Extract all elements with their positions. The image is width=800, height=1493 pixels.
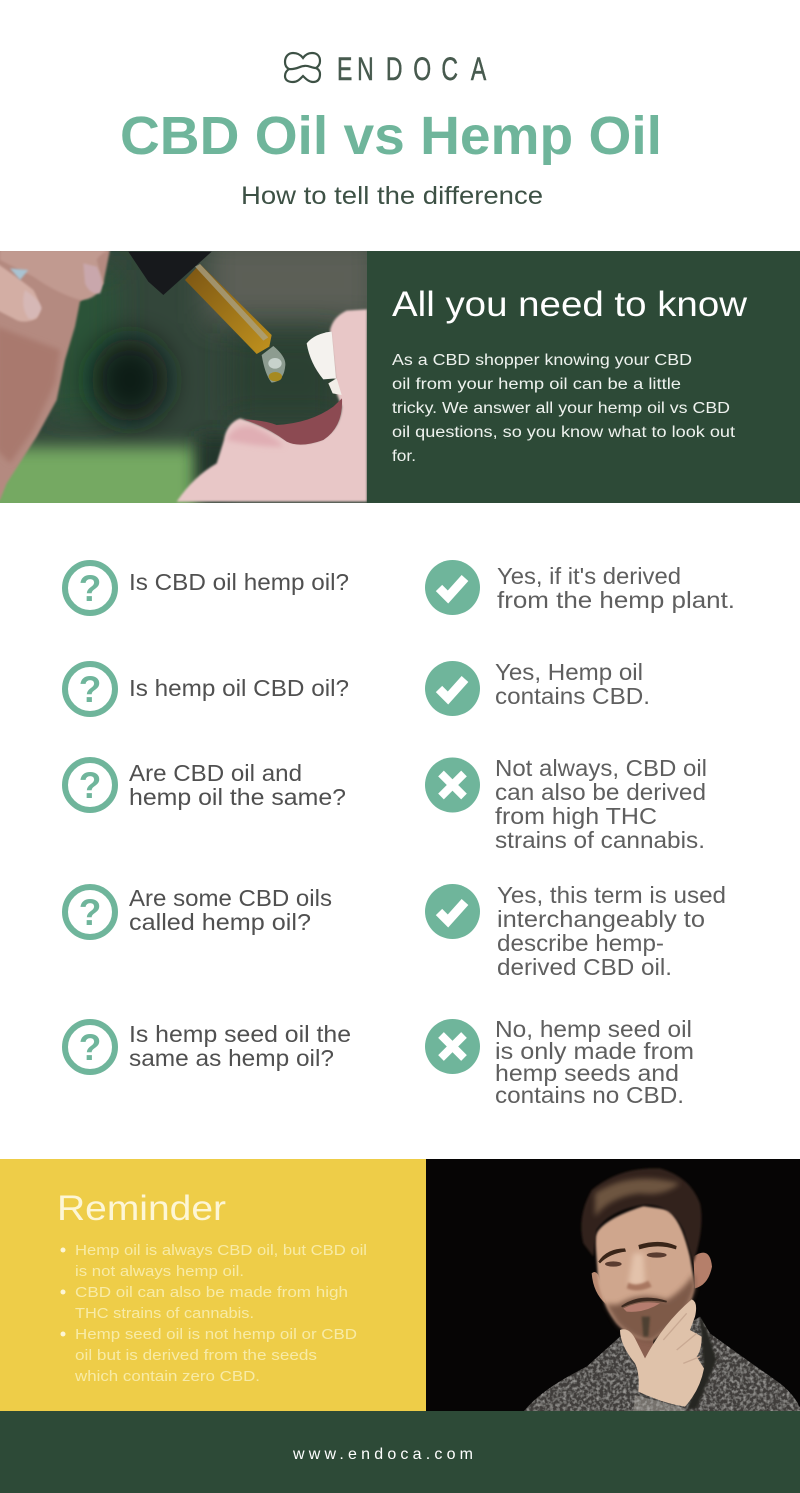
- intro paragraph: As a CBD shopper knowing your CBD: [392, 352, 692, 369]
- icon: question mark: ?: [79, 1027, 101, 1068]
- answer text: from the hemp plant.: [497, 587, 735, 613]
- neck: [633, 1335, 654, 1358]
- panel: all you need to know: [367, 251, 800, 503]
- answer text: Not always, CBD oil: [495, 755, 707, 781]
- question 1: [65, 563, 349, 613]
- question text: [129, 1021, 351, 1071]
- reminder list: Hemp seed oil is not hemp oil or CBD: [75, 1326, 357, 1343]
- logo wordmark: ENDOCA: [337, 51, 487, 87]
- answer 5: [425, 1016, 694, 1108]
- hand: [0, 250, 110, 500]
- answer text: Yes, if it's derived: [497, 563, 681, 589]
- question 2: [65, 664, 349, 714]
- question text: same as hemp oil?: [129, 1045, 334, 1071]
- question text: Are CBD oil and: [129, 760, 302, 786]
- answer text: describe hemp-: [497, 930, 664, 956]
- answer 1: [425, 560, 735, 615]
- answer text: interchangeably to: [497, 906, 705, 932]
- sweater: [523, 1317, 800, 1412]
- reminder heading: Reminder: [57, 1189, 226, 1228]
- icon: question mark: ?: [79, 669, 101, 710]
- intro paragraph: oil questions, so you know what to look out: [392, 424, 736, 441]
- panel heading: All you need to know: [392, 285, 748, 324]
- question text: [129, 885, 332, 935]
- intro paragraph: for.: [392, 448, 416, 465]
- question text: called hemp oil?: [129, 909, 311, 935]
- answer text: derived CBD oil.: [497, 954, 672, 980]
- lips and soul patch: [622, 1298, 667, 1337]
- icon: question mark: ?: [79, 765, 101, 806]
- answer 4: [425, 882, 726, 980]
- answer text: [495, 1016, 694, 1108]
- icon: cross: [425, 758, 480, 812]
- answer text: [497, 563, 735, 613]
- answer text: [495, 755, 707, 853]
- panel: thinking man photo: [426, 1159, 800, 1412]
- reminder list: Hemp oil is always CBD oil, but CBD oil: [75, 1242, 367, 1259]
- question text: Is hemp seed oil the: [129, 1021, 351, 1047]
- reminder list: CBD oil can also be made from high: [75, 1284, 348, 1301]
- reminder list: oil but is derived from the seeds: [75, 1347, 317, 1364]
- icon: check: [425, 884, 480, 939]
- question text: Is CBD oil hemp oil?: [129, 569, 349, 595]
- answer text: [495, 659, 650, 709]
- answer text: is only made from: [495, 1038, 694, 1064]
- intro paragraph: oil from your hemp oil can be a little: [392, 376, 681, 393]
- website url: www.endoca.com: [292, 1446, 473, 1463]
- answer text: can also be derived: [495, 779, 706, 805]
- question text: Is hemp oil CBD oil?: [129, 675, 349, 701]
- stubble beard: [605, 1273, 695, 1342]
- question text: Are some CBD oils: [129, 885, 332, 911]
- icon: question mark: [65, 887, 115, 937]
- answer 3: [425, 755, 707, 853]
- question text: hemp oil the same?: [129, 784, 346, 810]
- answer text: strains of cannabis.: [495, 827, 705, 853]
- icon: question mark: [65, 1022, 115, 1072]
- photo background: [0, 237, 380, 520]
- cuff: [633, 1395, 685, 1412]
- answer text: contains no CBD.: [495, 1082, 684, 1108]
- icon: question mark: [65, 664, 115, 714]
- finger creases: [663, 1313, 700, 1363]
- hair highlight: [595, 1178, 680, 1217]
- question 4: [65, 885, 332, 937]
- icon: cross: [425, 1019, 480, 1074]
- icon: Endoca logo mark: [285, 53, 320, 82]
- question 5: [65, 1021, 351, 1072]
- icon: question mark: [65, 760, 115, 810]
- question 3: [65, 760, 346, 810]
- reminder list: which contain zero CBD.: [74, 1368, 260, 1385]
- hand: [620, 1299, 704, 1407]
- title: CBD Oil vs Hemp Oil: [120, 106, 662, 166]
- icon: question mark: ?: [79, 892, 101, 933]
- answer 2: [425, 659, 650, 716]
- panel: reminder: [0, 1159, 426, 1411]
- reminder list: is not always hemp oil.: [75, 1263, 244, 1280]
- intro paragraph: tricky. We answer all your hemp oil vs CBD: [392, 400, 730, 417]
- answer text: from high THC: [495, 803, 657, 829]
- panel: dropper photo: [0, 251, 367, 503]
- face and mouth: [177, 309, 367, 502]
- answer text: contains CBD.: [495, 683, 650, 709]
- icon: question mark: [65, 563, 115, 613]
- collar shadow: [687, 1317, 717, 1410]
- reminder list: [60, 1242, 367, 1385]
- nose: [627, 1253, 652, 1290]
- icon: check: [425, 560, 480, 615]
- question text: [129, 760, 346, 810]
- subtitle: How to tell the difference: [241, 182, 543, 210]
- eyes and brows: [598, 1242, 677, 1267]
- dropper: [128, 252, 285, 383]
- answer text: Yes, this term is used: [497, 882, 726, 908]
- answer text: [497, 882, 726, 980]
- answer text: No, hemp seed oil: [495, 1016, 692, 1042]
- intro paragraph: [392, 352, 736, 465]
- icon: question mark: ?: [79, 568, 101, 609]
- face: [595, 1206, 695, 1340]
- answer text: hemp seeds and: [495, 1060, 679, 1086]
- hair: [581, 1168, 701, 1263]
- reminder list: THC strains of cannabis.: [75, 1305, 254, 1322]
- logo: [285, 51, 487, 87]
- icon: check: [425, 661, 480, 716]
- footer: [0, 1411, 800, 1493]
- ears: [592, 1253, 712, 1304]
- answer text: Yes, Hemp oil: [495, 659, 643, 685]
